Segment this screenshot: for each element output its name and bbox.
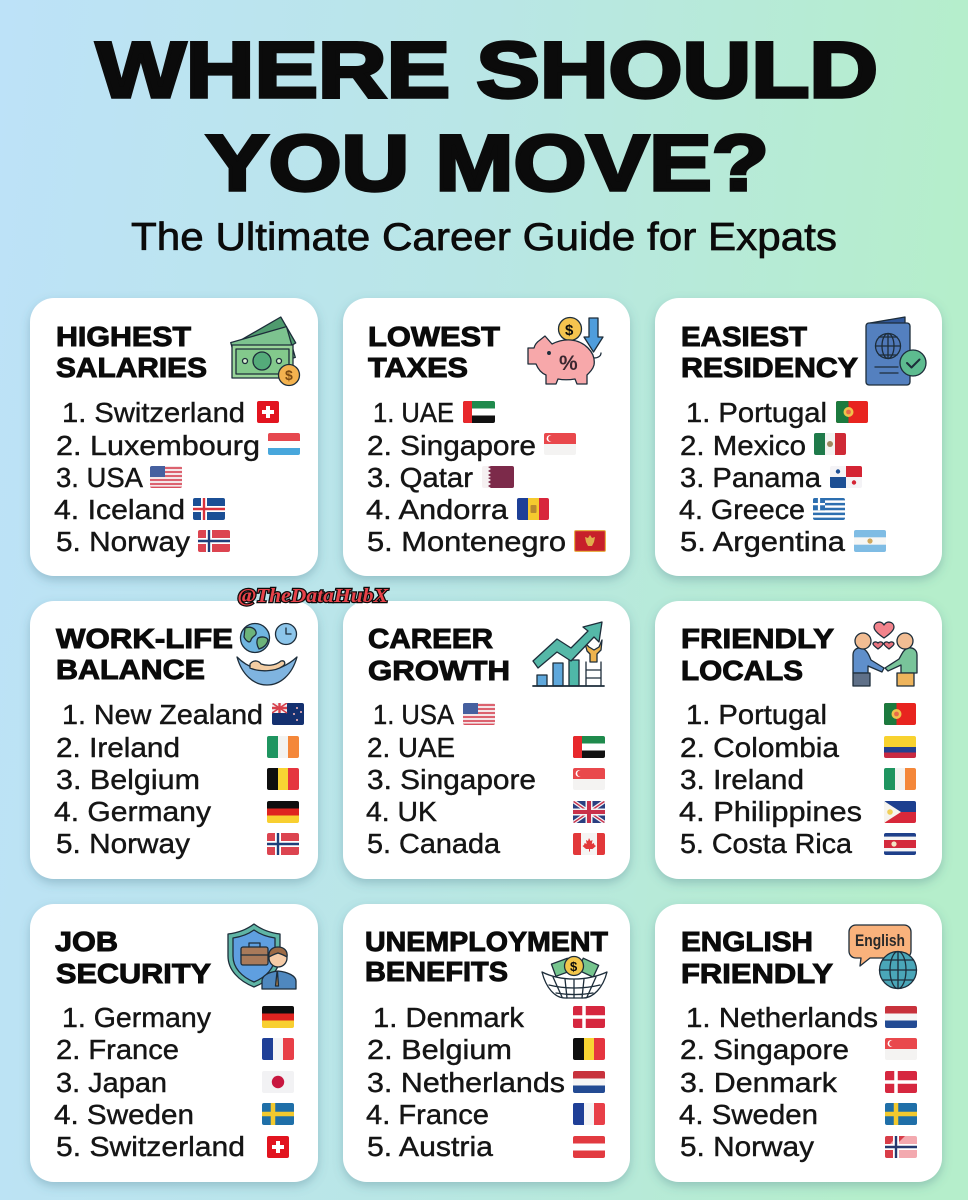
row: Philippines: 4. Philippines [679,796,862,827]
subtitle: The Ultimate Career Guide for Expats [131,216,837,259]
heading: english friendly: FRIENDLY [681,958,833,989]
heading: highest salaries: SALARIES [56,352,207,383]
row: Singapore [367,764,605,795]
row: Norway: 5. Norway [56,828,190,859]
row: Germany [54,796,299,827]
panel: easiest residency [655,298,942,576]
heading: english friendly: ENGLISH [681,926,813,957]
heading: career growth [368,623,510,686]
icon: safety net with money: $ [570,959,578,974]
flag: Portugal [884,703,916,725]
flag: Belgium [267,768,299,790]
icon: money bills and coin [231,317,300,386]
heading: work-life balance [56,623,233,685]
heading: job security: JOB [55,926,118,957]
heading: easiest residency [681,321,858,383]
row: Germany [62,1002,294,1033]
row: Japan [56,1067,294,1098]
flag: Germany [267,801,299,823]
row: UK [366,796,605,827]
row: Japan: 3. Japan [56,1067,167,1098]
icon: safety net with money [542,956,607,998]
row: Costa Rica: 5. Costa Rica [680,828,852,859]
row: Ireland [56,732,299,763]
icon: piggy bank with coin and down arrow: $ [565,322,574,339]
flag: France [262,1038,294,1060]
flag: Netherlands [573,1071,605,1093]
heading: job security [55,926,211,989]
flag: Denmark [885,1071,917,1093]
flag: Singapore [544,433,576,455]
heading: work-life balance: BALANCE [56,654,205,685]
flag: Switzerland [267,1136,289,1158]
heading: friendly locals: FRIENDLY [681,623,834,654]
row: Germany: 4. Germany [54,796,211,827]
panel: highest salaries [30,298,318,576]
row: Singapore: 2. Singapore [680,1034,849,1065]
row: Denmark [680,1067,917,1098]
row: Belgium: 2. Belgium [367,1034,512,1065]
row: Singapore [680,1034,917,1065]
panel: job security [30,904,318,1182]
row: Sweden [54,1099,294,1130]
row: Austria: 5. Austria [367,1131,493,1162]
row: New Zealand: 1. New Zealand [62,699,263,730]
row: Norway: 5. Norway [56,526,190,557]
row: Colombia: 2. Colombia [680,732,839,763]
flag: New Zealand [272,703,304,725]
row: Singapore: 2. Singapore [367,430,536,461]
heading: lowest taxes [368,321,500,383]
row: Panama: 3. Panama [680,462,821,493]
flag: Japan [262,1071,294,1093]
flag: Panama [830,466,862,488]
flag: Belgium [573,1038,605,1060]
icon: piggy bank with coin and down arrow: % [559,352,578,375]
row: Ireland: 2. Ireland [56,732,180,763]
icon: growth chart with arrow and climber [533,622,604,686]
flag: Canada [573,833,605,855]
flag: Andorra [517,498,549,520]
row: Norway [680,1131,917,1162]
flag: Sweden [262,1103,294,1125]
row: Colombia [680,732,916,763]
panel: career growth [343,601,630,879]
row: Norway: 5. Norway [680,1131,814,1162]
row: Sweden: 4. Sweden [54,1099,194,1130]
flag: Argentina [854,530,886,552]
row: UAE [367,732,605,763]
flag: Netherlands [885,1006,917,1028]
flag: Portugal [836,401,868,423]
flag: Iceland [193,498,225,520]
flag: Mexico [814,433,846,455]
row: Ireland [680,764,916,795]
row: Portugal: 1. Portugal [686,397,827,428]
flag: Germany [262,1006,294,1028]
flag: Sweden [885,1103,917,1125]
flag: Norway [885,1136,917,1158]
flag: USA [463,703,495,725]
panel: unemployment benefits [343,904,630,1182]
icon: piggy bank with coin and down arrow [528,318,603,384]
row: Andorra: 4. Andorra [366,494,508,525]
flag: USA [150,466,182,488]
row: Argentina: 5. Argentina [680,526,845,557]
heading: lowest taxes: LOWEST [368,321,500,352]
row: Norway [56,828,299,859]
row: Denmark: 1. Denmark [373,1002,525,1033]
panel: work-life balance [30,601,318,879]
row: Portugal [686,699,916,730]
flag: Singapore [885,1038,917,1060]
row: Montenegro: 5. Montenegro [367,526,566,557]
flag: Montenegro [574,530,606,552]
flag: Greece [813,498,845,520]
row: Sweden: 4. Sweden [679,1099,818,1130]
row: France [56,1034,294,1065]
heading: career growth: CAREER [368,623,493,654]
flag: Switzerland [257,401,279,423]
icon: two people shaking hands with hearts [853,622,917,686]
flag: Norway [267,833,299,855]
row: Netherlands: 3. Netherlands [367,1067,565,1098]
row: Sweden [679,1099,917,1130]
row: Netherlands: 1. Netherlands [686,1002,878,1033]
heading: english friendly [681,926,833,989]
heading: friendly locals: LOCALS [681,655,803,686]
panel: lowest taxes [343,298,630,576]
heading: highest salaries: HIGHEST [56,321,191,352]
row: France: 2. France [56,1034,179,1065]
icon: passport with check badge [866,317,926,385]
row: Austria [367,1131,605,1162]
watermark: @TheDataHubX [238,585,389,607]
row: Denmark [373,1002,605,1033]
panel: english friendly [655,904,942,1182]
flag: Philippines [884,801,916,823]
row: France: 4. France [366,1099,489,1130]
row: Germany: 1. Germany [62,1002,211,1033]
title: WHERE SHOULD [96,25,878,114]
icon: english speech bubble and globe [849,925,916,988]
icon: globe, clock and hammock [237,624,297,685]
row: Switzerland: 5. Switzerland [56,1131,245,1162]
panel: friendly locals [655,601,942,879]
flag: UAE [573,736,605,758]
heading: work-life balance: WORK-LIFE [56,623,233,654]
row: USA: 1. USA [373,699,454,730]
title: YOU MOVE? [206,118,769,207]
row: Greece: 4. Greece [679,494,805,525]
flag: Costa Rica [884,833,916,855]
row: UAE: 1. UAE [373,397,454,428]
row: Qatar: 3. Qatar [367,462,473,493]
heading: unemployment benefits: UNEMPLOYMENT [365,926,608,957]
heading: unemployment benefits [365,926,608,987]
heading: job security: SECURITY [56,958,211,989]
row: UAE: 2. UAE [367,732,455,763]
row: Iceland: 4. Iceland [54,494,185,525]
heading: easiest residency: RESIDENCY [681,352,858,383]
row: Ireland: 3. Ireland [680,764,804,795]
flag: France [573,1103,605,1125]
flag: Ireland [884,768,916,790]
row: Singapore: 3. Singapore [367,764,536,795]
row: Portugal: 1. Portugal [686,699,827,730]
heading: easiest residency: EASIEST [681,321,807,352]
row: Belgium [367,1034,605,1065]
row: USA: 3. USA [56,462,143,493]
icon: english speech bubble and globe: English [855,931,905,950]
title [96,25,878,207]
row: Denmark: 3. Denmark [680,1067,838,1098]
heading: lowest taxes: TAXES [368,352,468,383]
icon: shield, briefcase and person [228,924,296,989]
heading: career growth: GROWTH [368,655,510,686]
flag: Luxembourg [268,433,300,455]
flag: UAE [463,401,495,423]
row: Belgium [56,764,299,795]
flag: Qatar [482,466,514,488]
row: Switzerland: 1. Switzerland [62,397,245,428]
flag: Ireland [267,736,299,758]
flag: UK [573,801,605,823]
row: Canada: 5. Canada [367,828,500,859]
heading: highest salaries [56,321,207,383]
row: Belgium: 3. Belgium [56,764,200,795]
row: Qatar [367,462,514,493]
row: Mexico: 2. Mexico [680,430,806,461]
flag: Colombia [884,736,916,758]
flag: Austria [573,1136,605,1158]
row: Canada [367,828,605,859]
row: Luxembourg: 2. Luxembourg [56,430,260,461]
icon: money bills and coin: $ [285,367,293,383]
heading: unemployment benefits: BENEFITS [365,956,508,987]
flag: Singapore [573,768,605,790]
row: France [366,1099,605,1130]
flag: Denmark [573,1006,605,1028]
row: UK: 4. UK [366,796,437,827]
heading: friendly locals [681,623,834,686]
flag: Norway [198,530,230,552]
